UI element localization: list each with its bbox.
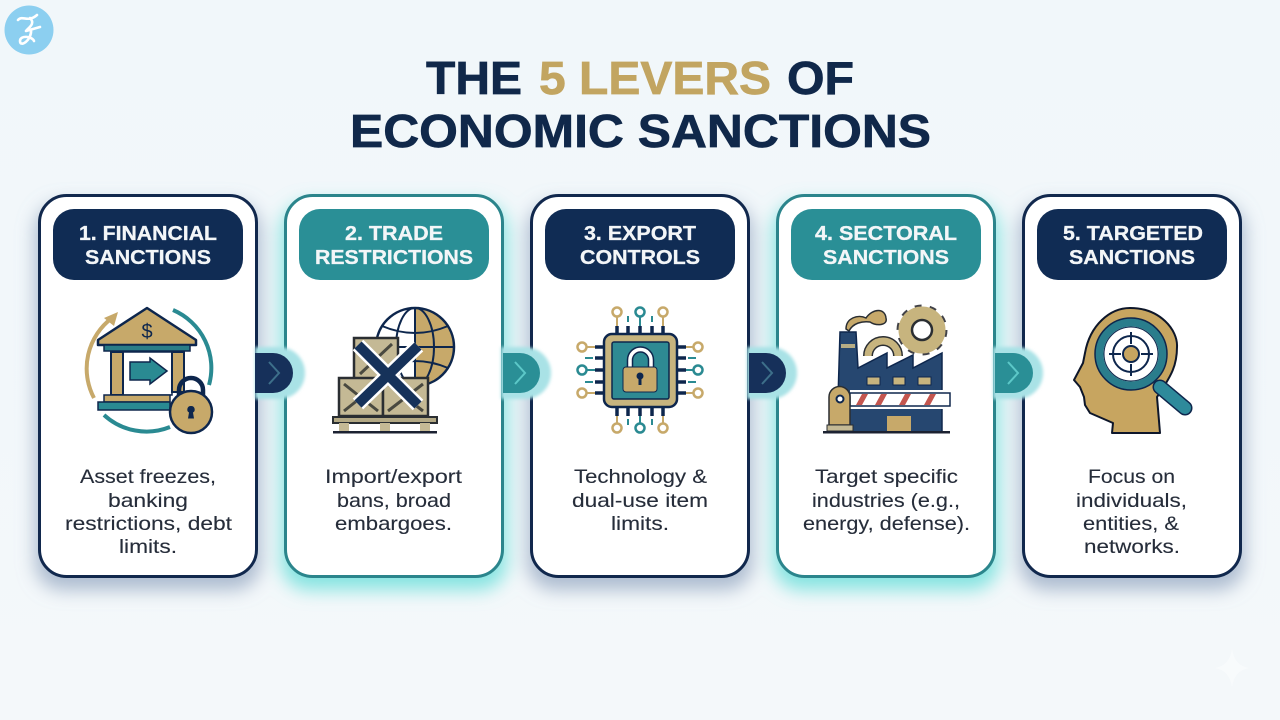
panel: financial sanctions	[40, 196, 256, 576]
text: sectoral description: energy, defense).	[803, 513, 970, 535]
title: ECONOMIC SANCTIONS	[350, 105, 931, 157]
heading: targeted sanctions: 5. TARGETED	[1063, 223, 1203, 245]
heading: financial sanctions: SANCTIONS	[85, 247, 211, 269]
panel: sectoral sanctions	[778, 196, 994, 576]
text: trade description: bans, broad	[337, 490, 451, 512]
heading: trade restrictions	[299, 209, 489, 280]
text: financial description: Asset freezes,	[80, 466, 216, 488]
icon: factory with barrier	[823, 309, 950, 434]
heading: sectoral sanctions: 4. SECTORAL	[815, 223, 957, 245]
heading: financial sanctions: 1. FINANCIAL	[79, 223, 217, 245]
icon: chip with lock	[578, 308, 702, 432]
text: targeted description: individuals,	[1076, 490, 1187, 512]
icon: faint sparkle	[1214, 648, 1250, 688]
arrow: card 4 to 5	[993, 347, 1043, 399]
text: targeted description: Focus on	[1088, 466, 1175, 488]
heading: sectoral sanctions: SANCTIONS	[823, 247, 949, 269]
heading: export controls	[545, 209, 735, 280]
heading: trade restrictions: 2. TRADE	[345, 223, 443, 245]
heading: targeted sanctions: SANCTIONS	[1069, 247, 1195, 269]
heading: trade restrictions: RESTRICTIONS	[315, 247, 473, 269]
text: financial description: banking	[108, 490, 188, 512]
text: financial description: limits.	[119, 536, 177, 558]
text: sectoral description	[803, 466, 970, 535]
arrow: card 1 to 2	[255, 347, 305, 399]
logo badge	[4, 6, 54, 54]
text: financial description	[65, 466, 233, 558]
heading: financial sanctions	[53, 209, 243, 280]
text: export description: Technology &	[574, 466, 707, 488]
panel: export controls	[532, 196, 748, 576]
title: OF	[787, 52, 854, 104]
text: trade description	[325, 466, 463, 535]
text: export description: limits.	[611, 513, 669, 535]
icon: bank with lock	[87, 308, 212, 433]
icon: head with magnifier and target	[1074, 308, 1185, 433]
text: export description	[572, 466, 708, 535]
heading: targeted sanctions	[1037, 209, 1227, 280]
heading: sectoral sanctions	[791, 209, 981, 280]
icon: bank with lock: $	[141, 321, 153, 343]
text: trade description: embargoes.	[335, 513, 452, 535]
text: export description: dual-use item	[572, 490, 708, 512]
text: trade description: Import/export	[325, 466, 463, 488]
arrow: card 2 to 3	[501, 347, 551, 399]
text: sectoral description: Target specific	[815, 466, 958, 488]
title	[350, 52, 931, 157]
text: financial description: restrictions, debt	[65, 513, 233, 535]
title: THE	[426, 52, 522, 104]
panel: targeted sanctions	[1024, 196, 1240, 576]
panel: trade restrictions	[286, 196, 502, 576]
title: 5 LEVERS	[539, 52, 771, 104]
text: targeted description: networks.	[1084, 536, 1180, 558]
text: targeted description	[1076, 466, 1187, 558]
icon: crates and globe with cross	[333, 308, 454, 434]
text: sectoral description: industries (e.g.,	[812, 490, 960, 512]
card shadows and glows	[35, 203, 1245, 590]
heading: export controls: CONTROLS	[580, 247, 700, 269]
text: targeted description: entities, &	[1083, 513, 1179, 535]
heading: export controls: 3. EXPORT	[584, 223, 696, 245]
arrow: card 3 to 4	[747, 347, 797, 399]
